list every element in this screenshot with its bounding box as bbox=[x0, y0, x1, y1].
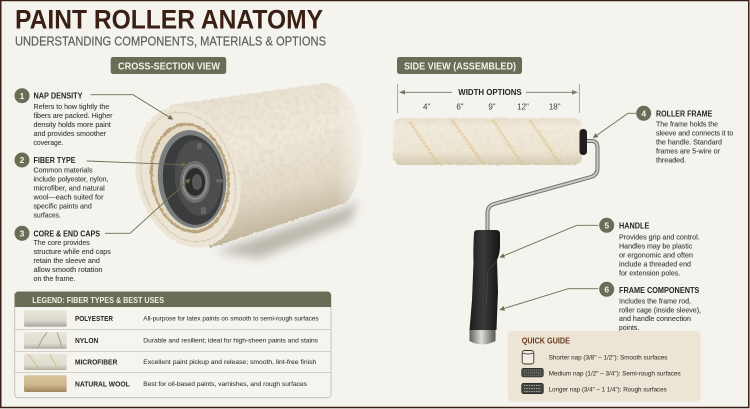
width options dimension bbox=[398, 84, 579, 113]
legend row: polyester: POLYESTER bbox=[75, 314, 113, 323]
legend row: natural wool bbox=[24, 375, 308, 392]
callout 6: frame components bbox=[599, 282, 701, 332]
width options dimension: 4" bbox=[423, 102, 431, 111]
callout 3: core and end caps: The core provides bbox=[34, 238, 90, 247]
icon: short nap bbox=[522, 350, 534, 364]
legend row: natural wool: Best for oil-based paints, varnishes, and rough surfaces bbox=[143, 381, 308, 388]
callout 5: handle bbox=[599, 218, 700, 277]
end cap bbox=[580, 129, 587, 155]
width options dimension: WIDTH OPTIONS bbox=[458, 88, 522, 97]
callout 5: handle: Provides grip and control. bbox=[619, 232, 700, 241]
icon: long nap bbox=[522, 383, 543, 394]
callout 4: roller frame: the handle. Standard bbox=[656, 138, 722, 147]
callout 4: roller frame: threaded. bbox=[656, 156, 686, 165]
legend row: polyester bbox=[24, 310, 319, 327]
callout 3: core and end caps: retain the sleeve and bbox=[34, 256, 100, 265]
callout 4: roller frame: sleeve and connects it to bbox=[656, 129, 733, 138]
heading: cross-section view: CROSS-SECTION VIEW bbox=[118, 61, 221, 72]
roller sleeve bbox=[393, 118, 582, 165]
callout 2: fiber type: include polyester, nylon, bbox=[34, 175, 108, 184]
legend row: microfiber bbox=[24, 354, 317, 370]
callout 5: handle: include a threaded end bbox=[619, 259, 691, 268]
callout 5: handle: Handles may be plastic bbox=[619, 241, 693, 250]
callout 3: core and end caps: allow smooth rotation bbox=[34, 265, 103, 274]
arrow: fiber type leader bbox=[87, 161, 186, 165]
heading: cross-section view bbox=[111, 57, 226, 74]
legend row: microfiber: MICROFIBER bbox=[75, 358, 118, 367]
callout 3: core and end caps bbox=[14, 226, 111, 283]
arrow: frame components leader bbox=[500, 289, 598, 310]
legend row: nylon: NYLON bbox=[75, 336, 98, 345]
callout 3: core and end caps: CORE & END CAPS bbox=[34, 230, 101, 238]
callout 6: frame components: and handle connection bbox=[619, 314, 691, 323]
callout 6: frame components: 6 bbox=[604, 284, 609, 294]
assembled paint roller bbox=[393, 118, 598, 344]
callout 2: fiber type: surfaces. bbox=[34, 210, 61, 219]
callout 2: fiber type: FIBER TYPE bbox=[34, 156, 76, 165]
callout 6: frame components: Includes the frame rod, bbox=[619, 296, 691, 305]
callout 2: fiber type: microfiber, and natural bbox=[34, 184, 105, 192]
callout 5: handle: or ergonomic and often bbox=[619, 250, 693, 259]
quick guide heading: QUICK GUIDE bbox=[522, 336, 570, 346]
panel: quick guide: Shorter nap (3/8" – 1/2"): Smooth surfaces bbox=[549, 355, 668, 362]
legend row: polyester: All-purpose for latex paints on smooth to semi-rough surfaces bbox=[143, 316, 319, 323]
callout 3: core and end caps: structure while end caps bbox=[34, 247, 111, 256]
callout 5: handle: HANDLE bbox=[619, 222, 650, 231]
callout 5: handle: for extension poles. bbox=[619, 268, 680, 277]
panel: quick guide bbox=[508, 331, 701, 402]
callout 2: fiber type bbox=[14, 152, 108, 219]
callout 6: frame components: points. bbox=[619, 323, 639, 332]
callout 6: frame components: roller cage (inside sleeve), bbox=[619, 305, 701, 314]
legend row: nylon bbox=[24, 332, 319, 349]
callout 6: frame components: FRAME COMPONENTS bbox=[619, 286, 700, 295]
panel: quick guide: Medium nap (1/2" – 3/4"): Semi-rough surfaces bbox=[549, 371, 681, 378]
arrow: core leader bbox=[105, 179, 190, 233]
heading: side view bbox=[397, 57, 522, 74]
width options dimension: 12" bbox=[517, 102, 529, 111]
callout 3: core and end caps: 3 bbox=[20, 228, 25, 238]
heading: side view: SIDE VIEW (ASSEMBLED) bbox=[404, 61, 516, 72]
callout 2: fiber type: wool—each suited for bbox=[32, 192, 104, 202]
arrow: handle leader bbox=[500, 225, 598, 257]
callout 4: roller frame: frames are 5-wire or bbox=[656, 147, 721, 156]
callout 4: roller frame: 4 bbox=[641, 108, 646, 118]
callout 1: nap density: fibers are packed. Higher bbox=[34, 111, 113, 120]
callout 1: nap density: NAP DENSITY bbox=[34, 92, 83, 101]
callout 1: nap density: coverage. bbox=[34, 138, 64, 147]
width options dimension: 9" bbox=[488, 102, 496, 111]
title: PAINT ROLLER ANATOMY bbox=[15, 4, 323, 34]
callout 1: nap density: density holds more paint bbox=[34, 120, 111, 129]
legend row: microfiber: Excellent paint pickup and release; smooth, lint-free finish bbox=[143, 359, 317, 366]
callout 2: fiber type: 2 bbox=[20, 155, 25, 165]
panel: legend bbox=[15, 292, 331, 398]
handle grip bbox=[470, 230, 500, 330]
callout 4: roller frame: The frame holds the bbox=[656, 120, 718, 129]
legend header: LEGEND: FIBER TYPES & BEST USES bbox=[32, 295, 164, 305]
subtitle: UNDERSTANDING COMPONENTS, MATERIALS & OPTIONS bbox=[15, 35, 326, 49]
arrow: nap density leader bbox=[91, 95, 173, 119]
legend header bbox=[15, 292, 331, 307]
callout 1: nap density: Refers to how tightly the bbox=[34, 102, 109, 111]
frame wire bbox=[488, 141, 598, 236]
callout 5: handle: 5 bbox=[604, 220, 609, 230]
callout 4: roller frame bbox=[636, 106, 733, 165]
width options dimension: 6" bbox=[456, 102, 464, 111]
legend row: nylon: Durable and resilient; ideal for high-sheen paints and stains bbox=[143, 338, 319, 345]
callout 1: nap density: 1 bbox=[20, 91, 25, 101]
cross-section roller illustration bbox=[120, 83, 362, 260]
legend row: natural wool: NATURAL WOOL bbox=[75, 380, 130, 389]
callout 2: fiber type: specific paints and bbox=[34, 202, 92, 210]
callout 2: fiber type: Common materials bbox=[34, 166, 93, 175]
callout 1: nap density: and provides smoother bbox=[34, 129, 107, 138]
callout 1: nap density bbox=[14, 88, 113, 147]
icon: medium nap bbox=[522, 368, 543, 377]
handle ferrule bbox=[470, 330, 496, 344]
callout 3: core and end caps: on the frame. bbox=[34, 274, 76, 283]
panel: quick guide: Longer nap (3/4" – 1 1/4"): Rough surfaces bbox=[549, 387, 667, 394]
arrow: roller frame leader bbox=[593, 113, 636, 138]
callout 4: roller frame: ROLLER FRAME bbox=[656, 109, 713, 118]
width options dimension: 18" bbox=[549, 102, 561, 111]
